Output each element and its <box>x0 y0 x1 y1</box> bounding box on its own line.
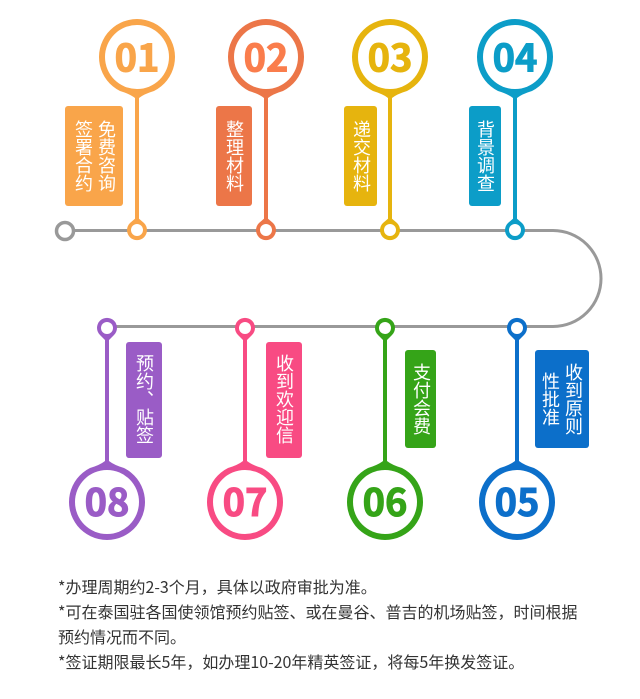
label 05: 收到原则 <box>561 363 587 435</box>
step 01 <box>65 19 175 240</box>
number 07: 07 <box>223 472 267 527</box>
label 08 <box>126 342 162 458</box>
label 02 <box>216 106 252 206</box>
label 07 <box>266 342 302 458</box>
pin 03 <box>352 19 428 240</box>
number 03: 03 <box>368 28 412 82</box>
label 06 <box>405 350 436 448</box>
step 08 <box>69 318 162 540</box>
label 03: 递交材料 <box>349 120 375 192</box>
footnotes: *可在泰国驻各国使领馆预约贴签、或在曼谷、普吉的机场贴签，时间根据 <box>58 599 577 623</box>
label 04 <box>469 106 501 206</box>
label 01: 签署合约 <box>71 120 97 192</box>
number 06: 06 <box>363 472 407 527</box>
pin 01 <box>99 19 175 240</box>
footnotes: 预约情况而不同。 <box>58 624 186 648</box>
step 02 <box>216 19 304 240</box>
label 07: 收到欢迎信 <box>272 354 298 444</box>
pin 05 <box>479 318 555 540</box>
pin 06 <box>347 318 423 540</box>
step 06 <box>347 318 436 540</box>
pin 08 <box>69 318 145 540</box>
footnotes: *办理周期约2-3个月，具体以政府审批为准。 <box>58 574 377 598</box>
timeline track <box>56 222 601 326</box>
label 06: 支付会费 <box>409 363 435 435</box>
label 02: 整理材料 <box>222 120 248 192</box>
number 01: 01 <box>115 28 159 82</box>
step 07 <box>207 318 302 540</box>
label 05 <box>535 350 589 448</box>
label 03 <box>344 106 377 206</box>
label 01: 免费咨询 <box>94 120 120 192</box>
number 04: 04 <box>493 28 537 82</box>
pin 07 <box>207 318 283 540</box>
number 08: 08 <box>85 472 129 527</box>
label 05: 性批准 <box>538 372 564 426</box>
label 04: 背景调查 <box>473 120 499 192</box>
step 04 <box>469 19 553 240</box>
step 03 <box>344 19 428 240</box>
label 08: 预约、贴签 <box>132 354 158 444</box>
pin 04 <box>477 19 553 240</box>
footnotes: *签证期限最长5年，如办理10-20年精英签证，将每5年换发签证。 <box>58 649 524 673</box>
step 05 <box>479 318 589 540</box>
number 02: 02 <box>244 28 288 82</box>
pin 02 <box>228 19 304 240</box>
number 05: 05 <box>495 472 539 527</box>
label 01 <box>65 106 123 206</box>
footnotes <box>58 574 577 673</box>
